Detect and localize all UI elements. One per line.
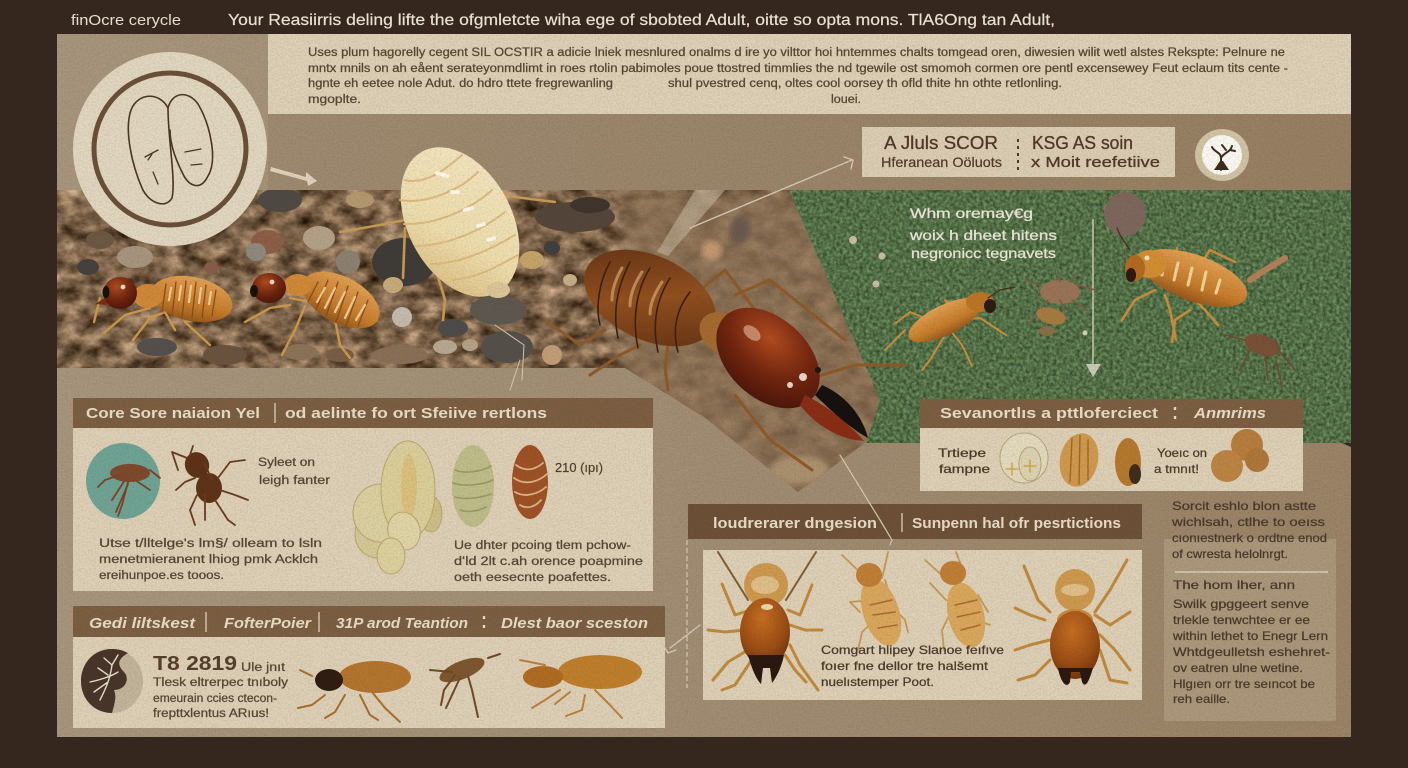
icon: plant medallion [81, 649, 143, 713]
text block: first note [1171, 499, 1327, 561]
text block: compact note: Comgart hlipey Slanoe feıfıve [821, 643, 1004, 657]
text block: second note: ov eatren ulne wetine. [1173, 661, 1303, 675]
text block: left: ereihunpoe.es tooos. [99, 570, 224, 582]
insect: worker on soil 2 [245, 260, 389, 358]
green scene caption [909, 205, 1057, 261]
top band right tone [268, 114, 1351, 190]
insect: pale larva [340, 127, 555, 320]
header bar: Sevanortlıs a pttloferciect [940, 405, 1158, 422]
header bar: FofterPoier [224, 615, 312, 632]
label: yoeic on: a tmnıt! [1154, 462, 1199, 476]
panel body [920, 428, 1303, 491]
label: trtiepe [938, 446, 990, 476]
green scene caption: negronicc tegnavets [911, 245, 1056, 261]
header bar [920, 399, 1303, 428]
arrow: circle to larva [270, 167, 317, 186]
insect: soldier right [1015, 560, 1130, 685]
icon: dark spider insect [172, 446, 248, 525]
insect: worker on soil 1 [94, 269, 237, 345]
header bar: od aelinte fo ort Sfeiive rertlons [285, 405, 547, 422]
icon: orange larva [1055, 430, 1103, 490]
intro text panel: shul pvestred cenq, oltes cool oorsey th ofld thite hn othte retlonling. [668, 78, 1062, 90]
photo: soil scene [57, 188, 890, 495]
green scene caption: woix h dheet hitens [909, 227, 1057, 243]
panel: core section [73, 398, 653, 591]
photo: green leaf scene [780, 190, 1355, 445]
insect: worker on leaf large [1117, 228, 1254, 342]
stat: 210: 210 (ıpı) [555, 461, 603, 475]
arrow: soldier to callout [657, 157, 853, 256]
dashed guide [686, 540, 688, 688]
icon: egg pair [1000, 433, 1048, 483]
intro text panel: louei. [831, 94, 861, 106]
icon: brown seed pod [512, 445, 548, 519]
text block: stat note [153, 662, 288, 720]
icon: teal insect medallion [86, 443, 160, 519]
text block: second note: trlekle tenwchtee er ee [1173, 613, 1310, 627]
header line: small label: finOcre cerycle [71, 12, 181, 29]
intro text panel: Uses plum hagorelly cegent SIL OCSTIR a adicie lniek mesnlured onalms d ire yo vilttor hoi hntemmes chalts tomgead oren, diwesien wilit wetl alstes Rekspte: Pelnure ne [308, 47, 1285, 59]
panel: diet section [73, 606, 665, 728]
insect: debris clump [1104, 192, 1146, 236]
translucent backing [1164, 539, 1336, 721]
intro text panel: hgnte eh eetee nole Adut. do hdro ttete fregrewanling [308, 78, 613, 90]
header bar: 31P arod Teantion [336, 615, 468, 632]
text block: right: dʻld 2lt c.ah orence poapmine [454, 556, 643, 568]
icon: tree badge [1195, 129, 1249, 181]
text block: second note: Whtdgeulletsh eshehret- [1173, 645, 1330, 659]
text block: second note: reh eaille. [1173, 692, 1230, 706]
icon: seed circle [73, 52, 267, 246]
insect: leaf fragment right [1250, 258, 1285, 280]
header bar: Dlest baor sceston [501, 615, 648, 632]
callout box: adults score [862, 127, 1175, 177]
text block: stat note: emeurain ccies ctecon- [153, 693, 277, 705]
insect: brown slender [430, 653, 500, 717]
callout box: adults score: KSG AS soin [1032, 133, 1133, 153]
header bar [73, 398, 653, 428]
icon: seed balls [1211, 429, 1269, 482]
header bar [688, 504, 1142, 539]
text block: stat note: Ule jnıt [241, 662, 286, 674]
insect: small brown bottom right [1225, 329, 1295, 388]
stat: T8 2819: T8 2819 [153, 653, 237, 675]
insect: brown worker [298, 661, 411, 722]
callout box: adults score: A Jluls SCOR [884, 133, 998, 153]
text block: second note: Hlgıen orr tre seıncot be [1173, 677, 1315, 691]
text block: stat note: frepttxlentus ARıus! [153, 708, 269, 720]
text block: first note: of cwresta helolnrgt. [1172, 547, 1288, 561]
text block: second note [1172, 578, 1330, 706]
arrow: soldier to foundation [840, 455, 892, 545]
label: selected: leigh fanter [259, 475, 330, 487]
text block: compact note: foıer fne dellor tre halšemt [821, 659, 989, 673]
label: yoeic on [1154, 446, 1207, 476]
arrow: downward on leaf [1086, 219, 1101, 377]
callout box: adults score: Hferanean Oöluots [881, 154, 1002, 170]
label: selected [258, 457, 330, 487]
insect: amber worker [520, 655, 642, 718]
panel: foundation section [687, 504, 1142, 700]
text block: left: Utse t/lltelge's lm§/ olleam to lsln [99, 538, 322, 550]
intro text panel: mgoplte. [308, 94, 361, 106]
label: yoeic on: Yoeıc on [1157, 446, 1207, 460]
insect: worker on leaf small [885, 287, 1015, 370]
text block: left: menetmieranent lhiog pmk Acklch [99, 554, 318, 566]
label: trtiepe: fampne [939, 462, 990, 476]
text block: first note: cıonıestnerk o ordtne enod [1172, 531, 1327, 545]
header bar: Sunpenn hal ofr pesrtictions [912, 515, 1121, 532]
insect: worker middle 1 [842, 552, 909, 651]
panel body [73, 428, 653, 591]
text block: compact note [821, 643, 1004, 689]
header bar: Gedi liltskest [89, 615, 196, 632]
intro text panel: mntx mnils on ah eåent serateyonmdlimt in roes rtolin pabimoles poue ttostred timmlies the nd tgewile ost smomoh cormen ore pentl excensewey Feut eclaum tits cente - [308, 63, 1288, 75]
text block: first note: wichlsah, ctlhe to oeıss [1171, 515, 1325, 529]
intro text panel [268, 34, 1351, 114]
header bar: Core Sore naiaion Yel [86, 405, 260, 422]
text block: compact note: nuelıstemper Poot. [821, 675, 934, 689]
text block: second note: within lethet to Enegr Lern [1172, 629, 1328, 643]
label: trtiepe: Trtiepe [938, 446, 986, 460]
insect: worker middle 2 [925, 552, 991, 651]
corner notch [1342, 443, 1351, 447]
header line: title: Your Reasiirris deling lifte the ofgmletcte wiha ege of sbobted Adult, oitte so opta mons. TlA6Ong tan Adult, [228, 12, 1055, 29]
header bar: loudrerarer dngesion [713, 515, 877, 532]
insect: large soldier [548, 230, 905, 470]
callout box: adults score: x Moit reefetiive [1031, 154, 1160, 171]
arrow: to diet panel [662, 625, 700, 653]
icon: green pupa [452, 445, 494, 527]
panel: seven partners [920, 399, 1303, 491]
icon: brown head [1115, 438, 1141, 486]
panel body [73, 637, 665, 728]
insect: prey fragments [1025, 270, 1095, 336]
label: selected: Syleet on [258, 457, 315, 469]
icon: egg cluster [353, 441, 442, 574]
header bar [73, 606, 665, 637]
text block: stat note: Tlesk eltrerpec tnıboly [153, 677, 288, 689]
panel body [703, 550, 1142, 700]
green scene caption: Whm oremay€g [910, 205, 1033, 221]
text block: left [99, 538, 322, 582]
header bar: Anmrims [1193, 405, 1266, 422]
text block: right [454, 540, 643, 584]
text block: right: Ue dhter pcoing tlem pchow- [454, 540, 631, 552]
text block: second note: Swilk gpggeert senve [1173, 597, 1309, 611]
line: soldier to core panel [495, 325, 524, 390]
text block: first note: Sorcit eshlo blon astte [1172, 499, 1316, 513]
text block: second note: The hom lher, ann [1173, 578, 1295, 592]
divider [1175, 571, 1328, 573]
insect: soldier left [708, 552, 822, 690]
panel: side notes [1164, 499, 1336, 721]
text block: right: oeth eesecnte poafettes. [454, 572, 611, 584]
